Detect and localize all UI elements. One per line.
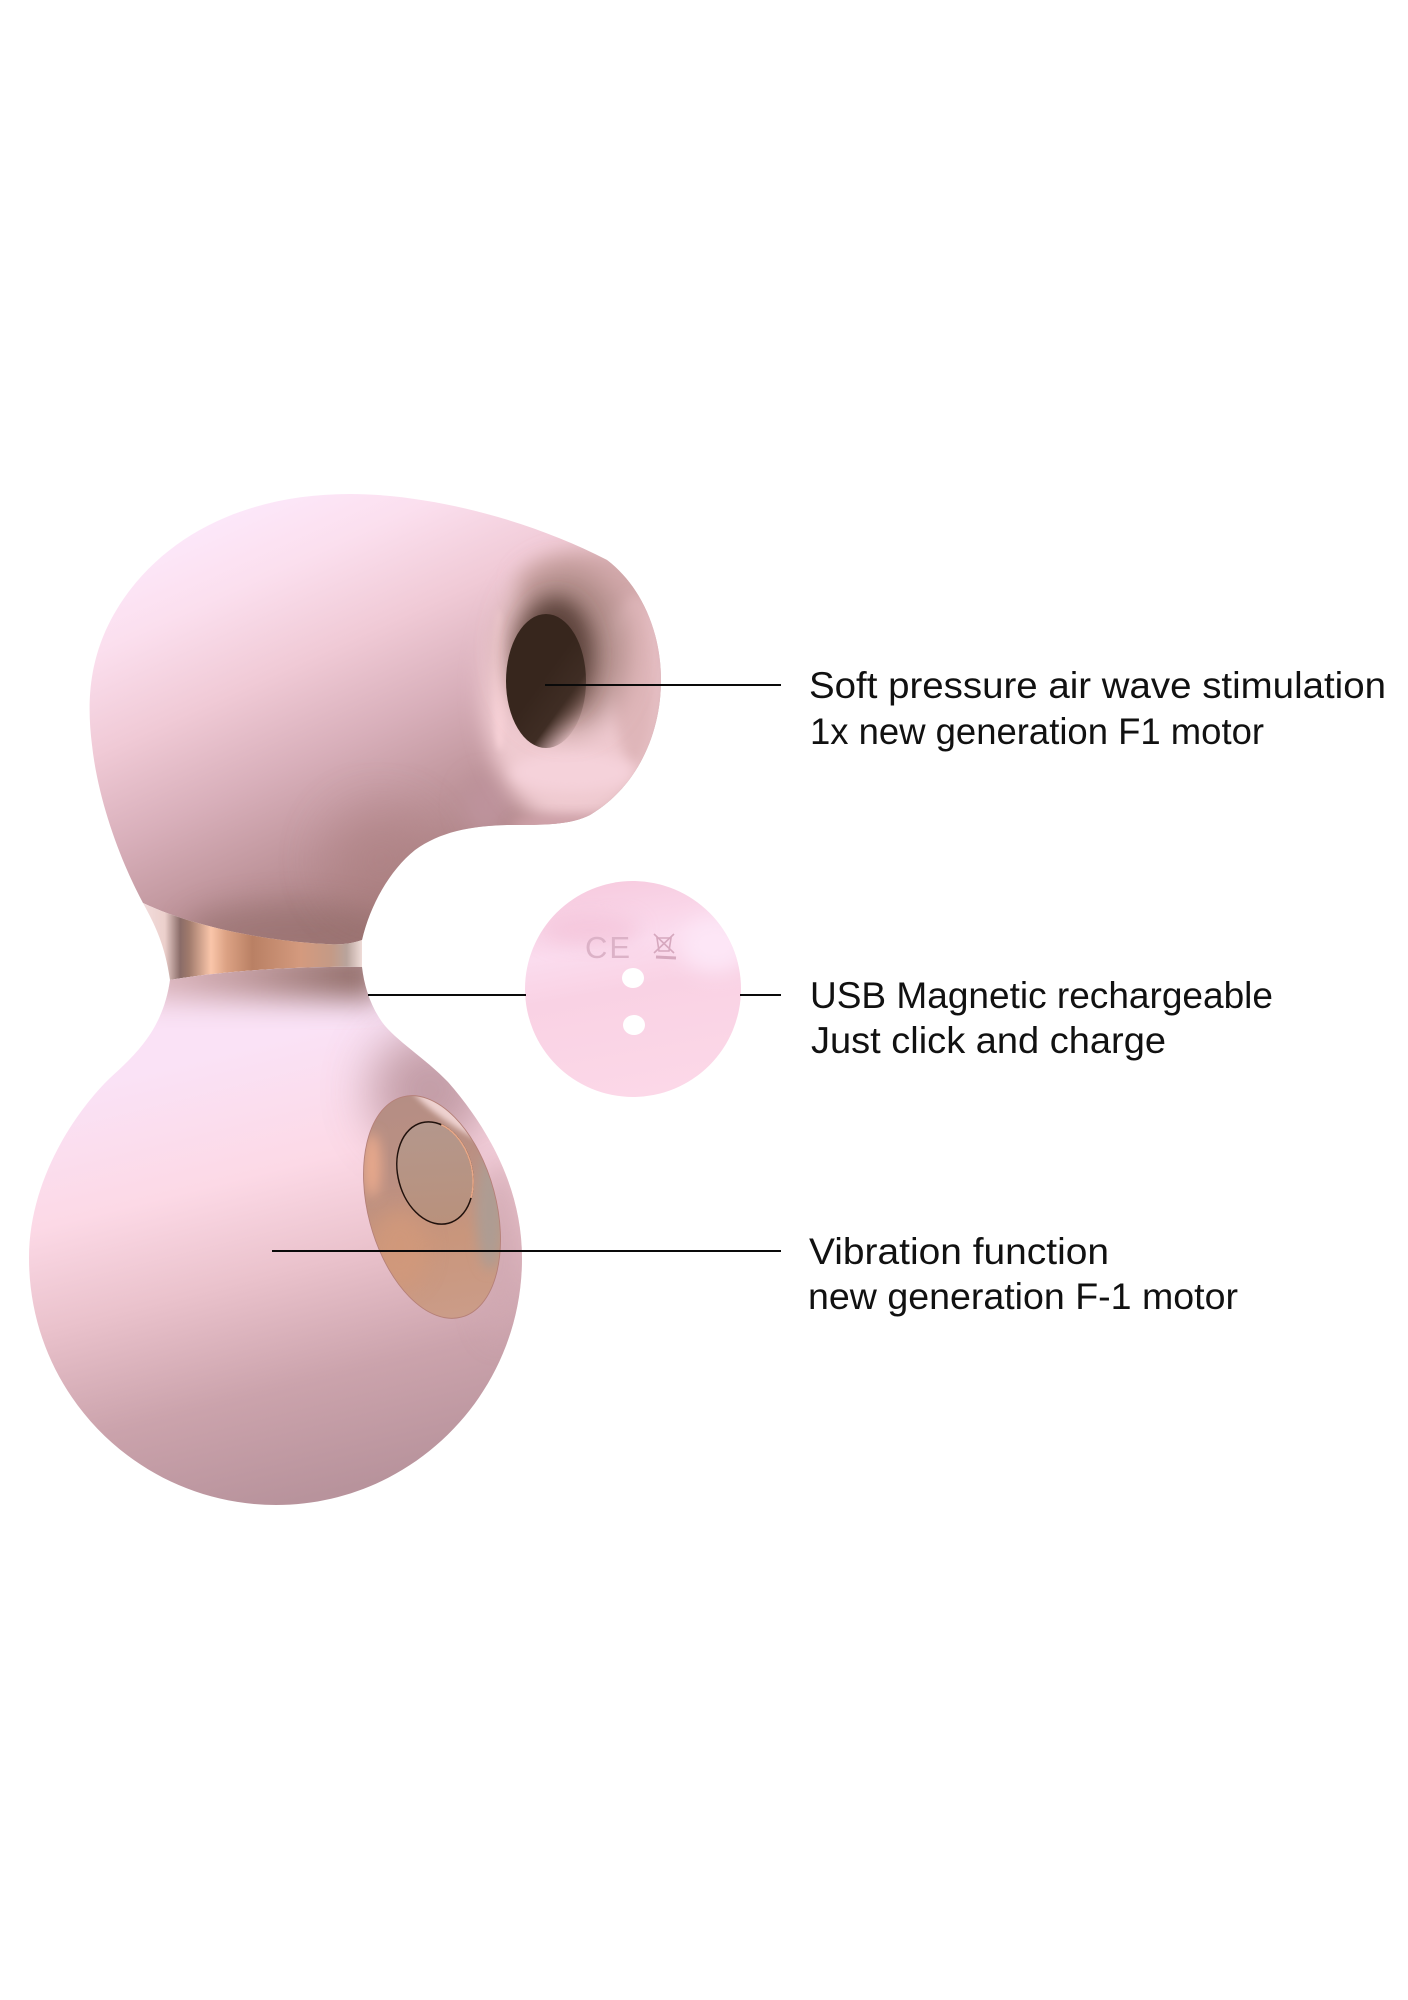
callout: air wave stimulation: 1x new generation F1 motor bbox=[810, 711, 1264, 752]
charging disc bbox=[525, 881, 750, 1097]
metal neck band bbox=[143, 903, 362, 980]
callout: USB charging: Just click and charge bbox=[811, 1020, 1166, 1061]
lower body bbox=[29, 966, 522, 1505]
product illustration bbox=[20, 480, 680, 1520]
leader line: charger left bbox=[368, 994, 526, 996]
WEEE mark bbox=[654, 934, 676, 958]
funnel halo bbox=[506, 570, 626, 730]
leader line: charger right bbox=[740, 994, 781, 996]
CE mark: CE bbox=[585, 930, 630, 965]
inner button circle bbox=[396, 1121, 474, 1225]
leader line: air wave bbox=[545, 684, 781, 686]
callout: USB charging bbox=[810, 975, 1273, 1061]
callout: vibration bbox=[808, 1231, 1238, 1317]
callout: air wave stimulation bbox=[809, 665, 1386, 752]
callout: air wave stimulation: Soft pressure air wave stimulation bbox=[809, 665, 1386, 706]
charging pins bbox=[622, 968, 645, 1035]
mouth funnel shadow bbox=[518, 597, 594, 713]
callout: USB charging: USB Magnetic rechargeable bbox=[810, 975, 1273, 1016]
callout: vibration: Vibration function bbox=[809, 1231, 1109, 1272]
mouth opening bbox=[506, 614, 586, 748]
control button plate bbox=[363, 1095, 501, 1319]
infographic canvas bbox=[29, 494, 1384, 1505]
mouth rim bbox=[481, 551, 667, 838]
callout: vibration: new generation F-1 motor bbox=[808, 1276, 1238, 1317]
upper head with mouth bbox=[90, 494, 661, 944]
leader line: vibration bbox=[272, 1250, 781, 1252]
